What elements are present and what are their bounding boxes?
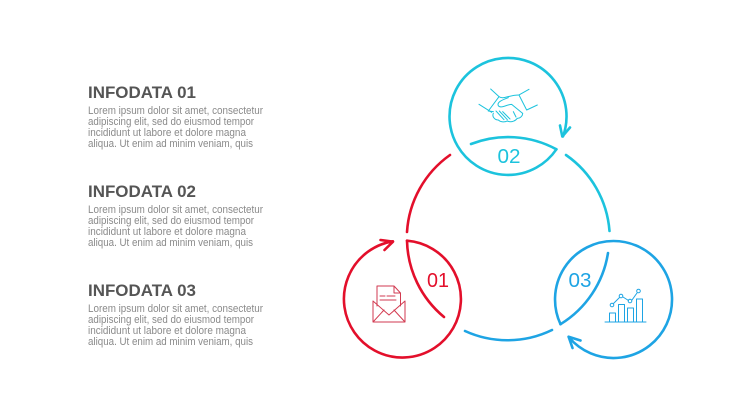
connecting arc: cyan xyxy=(566,155,610,231)
step 03: blue circle xyxy=(555,241,672,358)
leaf arc 01 xyxy=(407,241,444,317)
icon: handshake xyxy=(479,89,537,122)
connecting arc: red xyxy=(407,155,450,232)
step 01: red circle xyxy=(344,240,461,358)
number 02: 02 xyxy=(498,146,520,168)
number 03: 03 xyxy=(568,270,592,292)
text block: infodata 03: Lorem ipsum dolor sit amet, consectetur xyxy=(88,303,263,315)
text block: infodata 01: adipiscing elit, sed do eiusmod tempor xyxy=(88,116,254,128)
arrowhead 02 xyxy=(560,126,570,136)
icon: bar chart with trend line xyxy=(605,289,646,322)
circular arrow 02 xyxy=(450,58,567,175)
text block: infodata 02 xyxy=(88,182,263,249)
circular arrow 01 xyxy=(344,241,461,358)
text block: infodata 03: adipiscing elit, sed do eiusmod tempor xyxy=(88,314,254,326)
arrowhead 03 xyxy=(569,337,580,348)
text block: infodata 02: adipiscing elit, sed do eiusmod tempor xyxy=(88,215,254,227)
leaf arc 02 xyxy=(471,137,556,149)
circular arrow 03 xyxy=(555,241,672,358)
text block: infodata 03: INFODATA 03 xyxy=(88,281,196,300)
text block: infodata 03: aliqua. Ut enim ad minim veniam, quis xyxy=(88,336,253,348)
text block: infodata 03 xyxy=(88,281,263,348)
text block: infodata 02: incididunt ut labore et dolore magna xyxy=(88,226,247,238)
text block: infodata 01: aliqua. Ut enim ad minim veniam, quis xyxy=(88,138,253,150)
text block: infodata 01: incididunt ut labore et dolore magna xyxy=(88,127,247,139)
text block: infodata 02: Lorem ipsum dolor sit amet, consectetur xyxy=(88,204,263,216)
text block: infodata 01: Lorem ipsum dolor sit amet, consectetur xyxy=(88,105,263,117)
step 02: cyan circle xyxy=(450,58,570,175)
icon: envelope with letter xyxy=(373,286,405,322)
text block: infodata 01 xyxy=(88,83,263,150)
text block: infodata 02: aliqua. Ut enim ad minim veniam, quis xyxy=(88,237,253,249)
arrowhead 01 xyxy=(380,240,393,250)
connecting arc: blue xyxy=(465,330,552,340)
text block: infodata 03: incididunt ut labore et dolore magna xyxy=(88,325,247,337)
number 01: 01 xyxy=(427,270,449,292)
leaf arc 03 xyxy=(560,253,608,324)
text block: infodata 02: INFODATA 02 xyxy=(88,182,196,201)
text block: infodata 01: INFODATA 01 xyxy=(88,83,196,102)
